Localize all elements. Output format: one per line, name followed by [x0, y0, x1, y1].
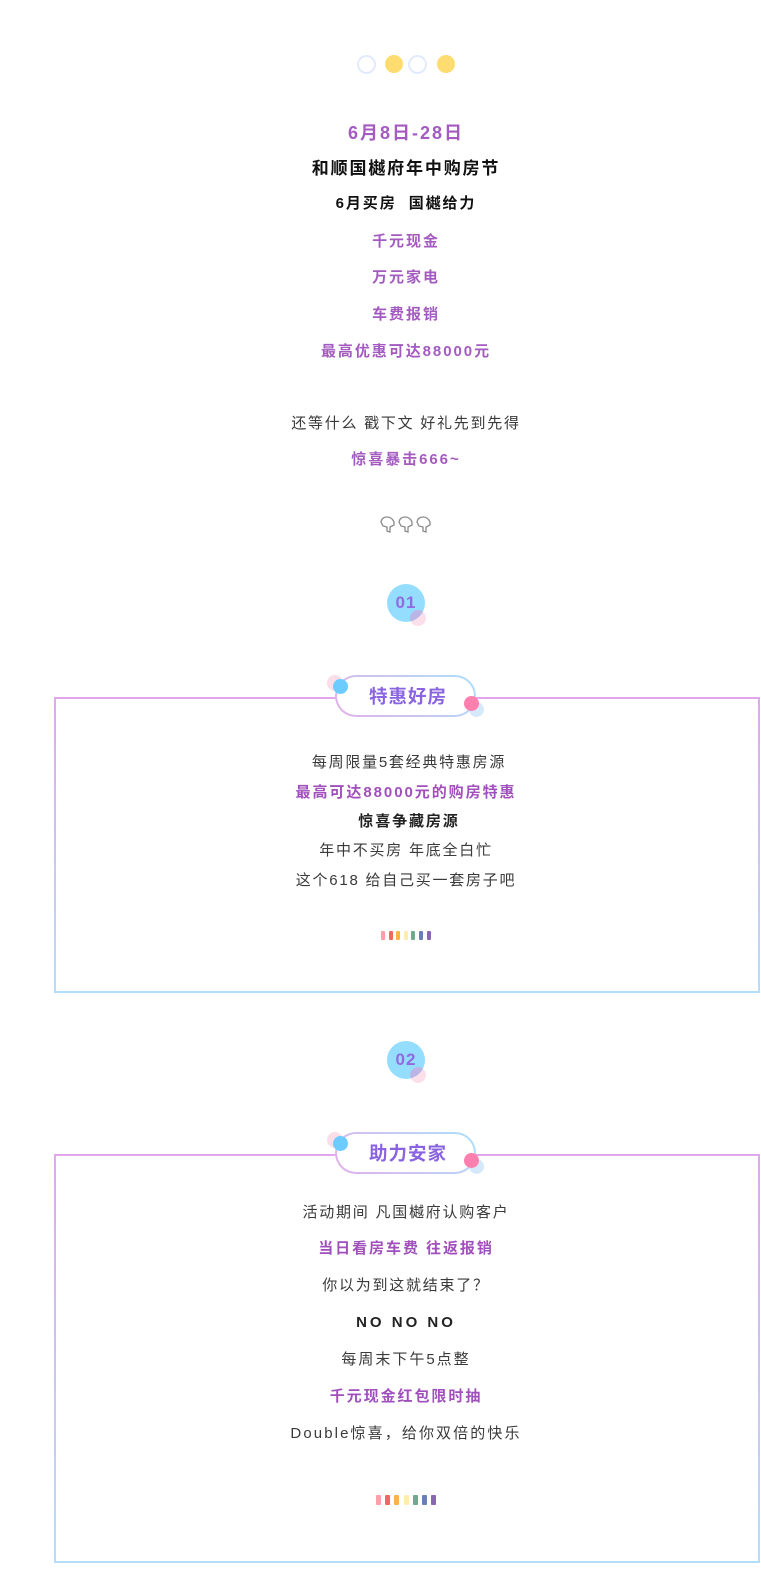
- panel text: 惊喜争藏房源: [358, 813, 460, 830]
- panel text: [290, 1204, 522, 1442]
- header dots: [357, 55, 455, 74]
- panel text: 千元现金红包限时抽: [330, 1388, 482, 1405]
- panel: 助力安家: [54, 1154, 760, 1563]
- icon: pointing down hands: [380, 516, 431, 533]
- intro text: 和顺国樾府年中购房节: [312, 159, 500, 178]
- intro text: 车费报销: [372, 306, 440, 323]
- panel text: Double惊喜，给你双倍的快乐: [290, 1425, 522, 1442]
- heading pill: 助力安家: [327, 1132, 484, 1174]
- panel text: NO NO NO: [356, 1314, 456, 1331]
- panel text: 你以为到这就结束了？: [322, 1277, 490, 1294]
- badge 01: 01: [396, 593, 416, 612]
- panel text: 每周末下午5点整: [341, 1351, 471, 1368]
- heading pill: 助力安家: 助力安家: [369, 1143, 447, 1164]
- badge 02: [387, 1041, 426, 1083]
- intro text: 最高优惠可达88000元: [321, 343, 491, 360]
- intro text: 6月买房 国樾给力: [336, 195, 476, 212]
- rainbow bars 2: [376, 1495, 436, 1505]
- badge 02: 02: [396, 1050, 416, 1069]
- rainbow bars 1: [381, 931, 431, 940]
- panel: 特惠好房: [54, 697, 760, 993]
- intro text: 还等什么 戳下文 好礼先到先得: [291, 415, 521, 432]
- intro text: 千元现金: [372, 233, 440, 250]
- panel text: 每周限量5套经典特惠房源: [312, 754, 506, 771]
- panel text: 这个618 给自己买一套房子吧: [296, 872, 516, 889]
- panel text: 活动期间 凡国樾府认购客户: [303, 1204, 509, 1221]
- panel text: 最高可达88000元的购房特惠: [296, 784, 516, 801]
- intro text: 万元家电: [372, 269, 440, 286]
- panel text: [296, 754, 516, 889]
- intro text: 6月8日-28日: [348, 123, 464, 143]
- intro text: [291, 123, 521, 468]
- heading pill: 特惠好房: [327, 675, 484, 717]
- heading pill: 特惠好房: 特惠好房: [369, 686, 447, 707]
- intro text: 惊喜暴击666~: [351, 451, 461, 468]
- panel text: 年中不买房 年底全白忙: [319, 842, 493, 859]
- panel text: 当日看房车费 往返报销: [318, 1240, 494, 1257]
- badge 01: [387, 584, 426, 626]
